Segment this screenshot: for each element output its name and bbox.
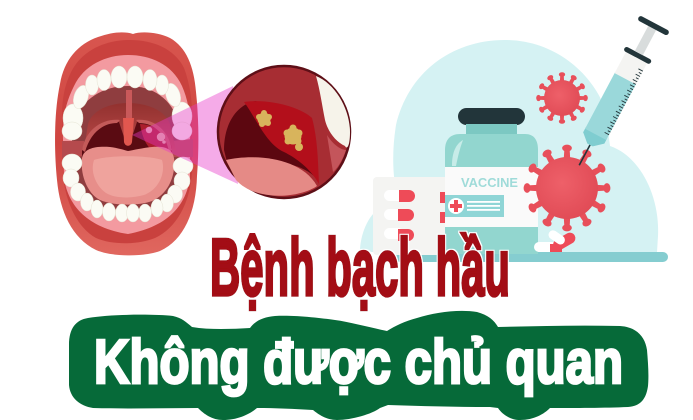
tongue in circle	[226, 157, 317, 196]
uvula	[123, 118, 134, 146]
mouth corner left	[62, 141, 84, 158]
magnifier beam	[132, 86, 238, 184]
illustration: vaccine scene	[360, 15, 670, 262]
vaccine bottle	[445, 108, 538, 254]
illustration: open mouth	[55, 32, 198, 255]
upper teeth	[62, 66, 192, 140]
blister pack	[373, 177, 453, 255]
pink gum	[63, 55, 190, 234]
red tonsil	[244, 101, 319, 184]
teeth in circle	[316, 76, 350, 147]
green scalloped banner	[69, 311, 648, 420]
tongue	[82, 147, 174, 205]
throat	[82, 122, 172, 160]
vaccine label text: VACCINE	[461, 176, 518, 190]
right tonsil	[140, 124, 172, 158]
dark throat	[224, 101, 316, 178]
label plate	[445, 195, 504, 217]
tonsil spots	[146, 127, 152, 133]
outer lips	[55, 32, 198, 255]
soft palate arch	[82, 120, 120, 152]
syringe	[564, 15, 670, 173]
magnified tonsil circle	[218, 66, 350, 198]
mouth corner right	[170, 139, 193, 157]
lighter right strip	[327, 135, 346, 172]
pale teal backdrop	[360, 40, 658, 252]
capsules	[534, 229, 577, 252]
palate	[84, 103, 176, 150]
ground line	[395, 252, 668, 262]
large virus	[524, 145, 610, 231]
spots	[256, 110, 303, 151]
small virus	[536, 72, 588, 124]
mouth cavity	[72, 86, 181, 210]
lower teeth	[62, 154, 193, 222]
